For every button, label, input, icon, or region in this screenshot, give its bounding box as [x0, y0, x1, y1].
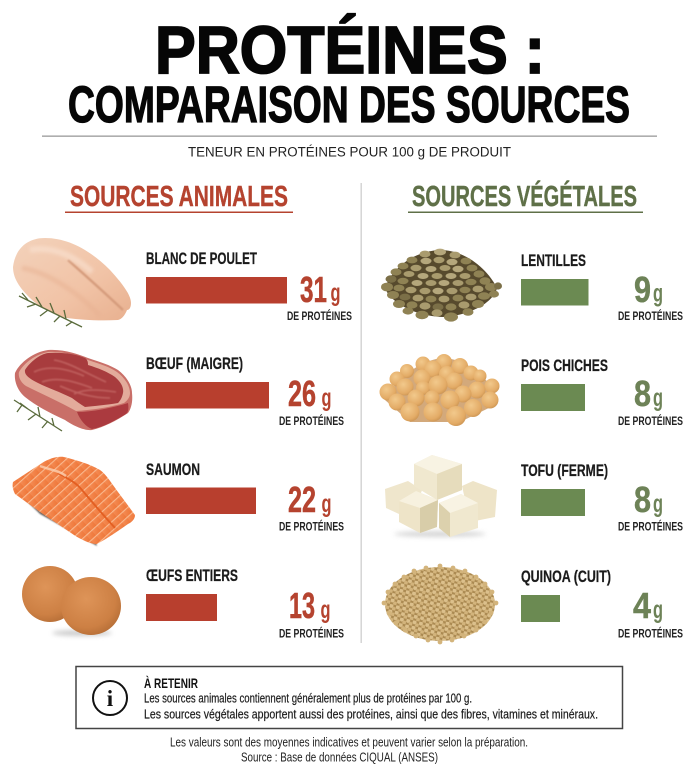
row: oeufs [22, 566, 344, 640]
label: BŒUF (MAIGRE) [146, 354, 243, 373]
icon: quinoa [382, 564, 498, 644]
icon: tofu [385, 455, 497, 537]
value: 26 g [279, 373, 344, 428]
value: 4 g: 4 [633, 585, 651, 626]
icon: info: i [107, 686, 114, 711]
label: TOFU (FERME) [521, 461, 608, 480]
bar: 26 g [146, 382, 269, 408]
value: 26 g: DE PROTÉINES [279, 413, 344, 428]
footer note: Les valeurs sont des moyennes indicatives et peuvent varier selon la préparation. [170, 736, 528, 750]
value: 8 g [618, 479, 683, 534]
value: 26 g: 26 [288, 373, 316, 414]
icon: info [93, 681, 127, 715]
label: QUINOA (CUIT) [521, 567, 611, 586]
value: 8 g: g [653, 384, 663, 412]
label: POIS CHICHES [521, 356, 608, 375]
value: 22 g: g [322, 490, 332, 518]
value: 13 g: 13 [289, 585, 315, 626]
footer note: Source : Base de données CIQUAL (ANSES) [241, 750, 438, 764]
icon: lentils [381, 249, 502, 322]
value: 8 g [618, 373, 683, 428]
value: 9 g: g [653, 280, 663, 308]
bar: 13 g [146, 594, 217, 621]
value: 9 g: 9 [634, 269, 651, 310]
value: 31 g: 31 [300, 269, 327, 310]
value: 8 g: 8 [634, 373, 651, 414]
bar: 9 g [521, 279, 588, 306]
value: 4 g: g [653, 596, 663, 624]
label: LENTILLES [521, 251, 586, 270]
subtitle: TENEUR EN PROTÉINES POUR 100 g DE PRODUIT [188, 144, 511, 160]
bar: 8 g [521, 384, 585, 411]
callout heading: À RETENIR [144, 675, 198, 691]
value: 22 g [279, 479, 344, 534]
icon: chickpeas [380, 354, 500, 426]
row: quinoa [382, 564, 683, 644]
value: 31 g [287, 269, 352, 323]
row: lentilles [381, 249, 683, 323]
row: tofu [385, 455, 683, 537]
row: saumon [13, 457, 344, 546]
label: SAUMON [146, 460, 200, 479]
heading: sources animales: SOURCES ANIMALES [70, 181, 288, 213]
value: 13 g: g [320, 596, 330, 624]
icon: steak [14, 350, 132, 431]
value: 8 g: 8 [634, 479, 651, 520]
title [68, 13, 630, 133]
value: 8 g: g [653, 490, 663, 518]
callout text [144, 690, 598, 722]
bar: 8 g [521, 489, 585, 516]
callout: à retenir [76, 666, 622, 728]
value: 31 g: DE PROTÉINES [287, 308, 352, 323]
row: pois chiches [380, 354, 683, 428]
callout text: Les sources animales contiennent généralement plus de protéines par 100 g. [144, 690, 472, 706]
value: 22 g: 22 [288, 479, 316, 520]
value: 13 g [279, 585, 344, 640]
title: PROTÉINES : [155, 13, 545, 88]
row: blanc de poulet [13, 238, 352, 327]
icon: chicken breast [13, 238, 131, 327]
value: 4 g [618, 585, 683, 640]
label: ŒUFS ENTIERS [146, 566, 238, 585]
label: BLANC DE POULET [146, 249, 257, 268]
value: 22 g: DE PROTÉINES [279, 518, 344, 534]
callout text: Les sources végétales apportent aussi des protéines, ainsi que des fibres, vitamines et minéraux. [144, 706, 598, 722]
footer note [170, 736, 528, 764]
bar: 4 g [521, 595, 560, 622]
value: 31 g: g [330, 279, 340, 307]
value: 13 g: DE PROTÉINES [279, 626, 344, 640]
value: 9 g [618, 269, 683, 323]
value: 26 g: g [322, 384, 332, 412]
icon: eggs [22, 566, 121, 636]
row: boeuf [14, 350, 344, 431]
icon: salmon [13, 457, 135, 546]
bar: 31 g [146, 277, 287, 304]
bar: 22 g [146, 488, 256, 514]
